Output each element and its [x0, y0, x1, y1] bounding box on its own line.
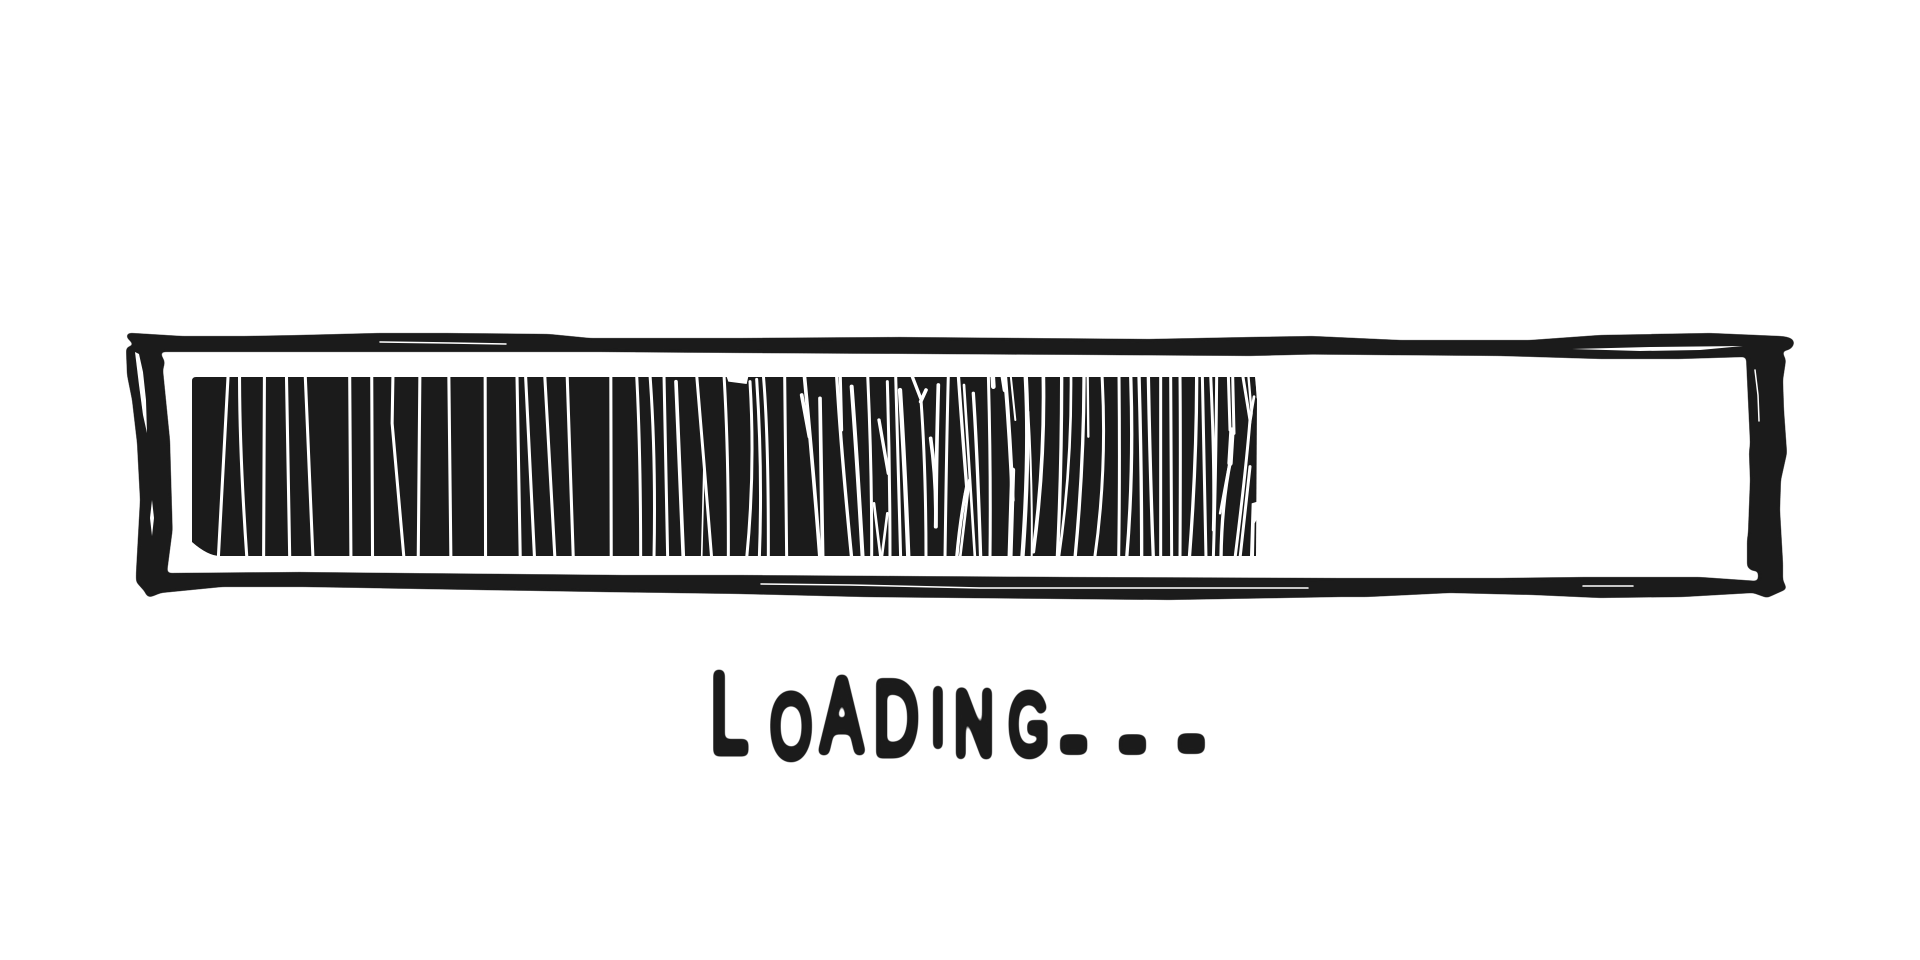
panel: hand-drawn progress bar	[126, 333, 1794, 600]
progress fill: striped bars	[192, 375, 1260, 558]
caption word: A	[821, 658, 863, 774]
caption word: O	[770, 677, 812, 776]
frame: sketched outer border	[126, 333, 1794, 600]
caption word: L	[710, 650, 748, 776]
caption word: N	[954, 673, 994, 776]
caption: LOADING...	[710, 650, 1211, 777]
caption dots: .	[1172, 659, 1211, 770]
caption word: G	[1009, 678, 1049, 773]
caption word: D	[874, 661, 919, 777]
caption word: I	[931, 672, 945, 762]
caption dots: .	[1054, 660, 1093, 771]
caption dots: .	[1113, 660, 1152, 771]
